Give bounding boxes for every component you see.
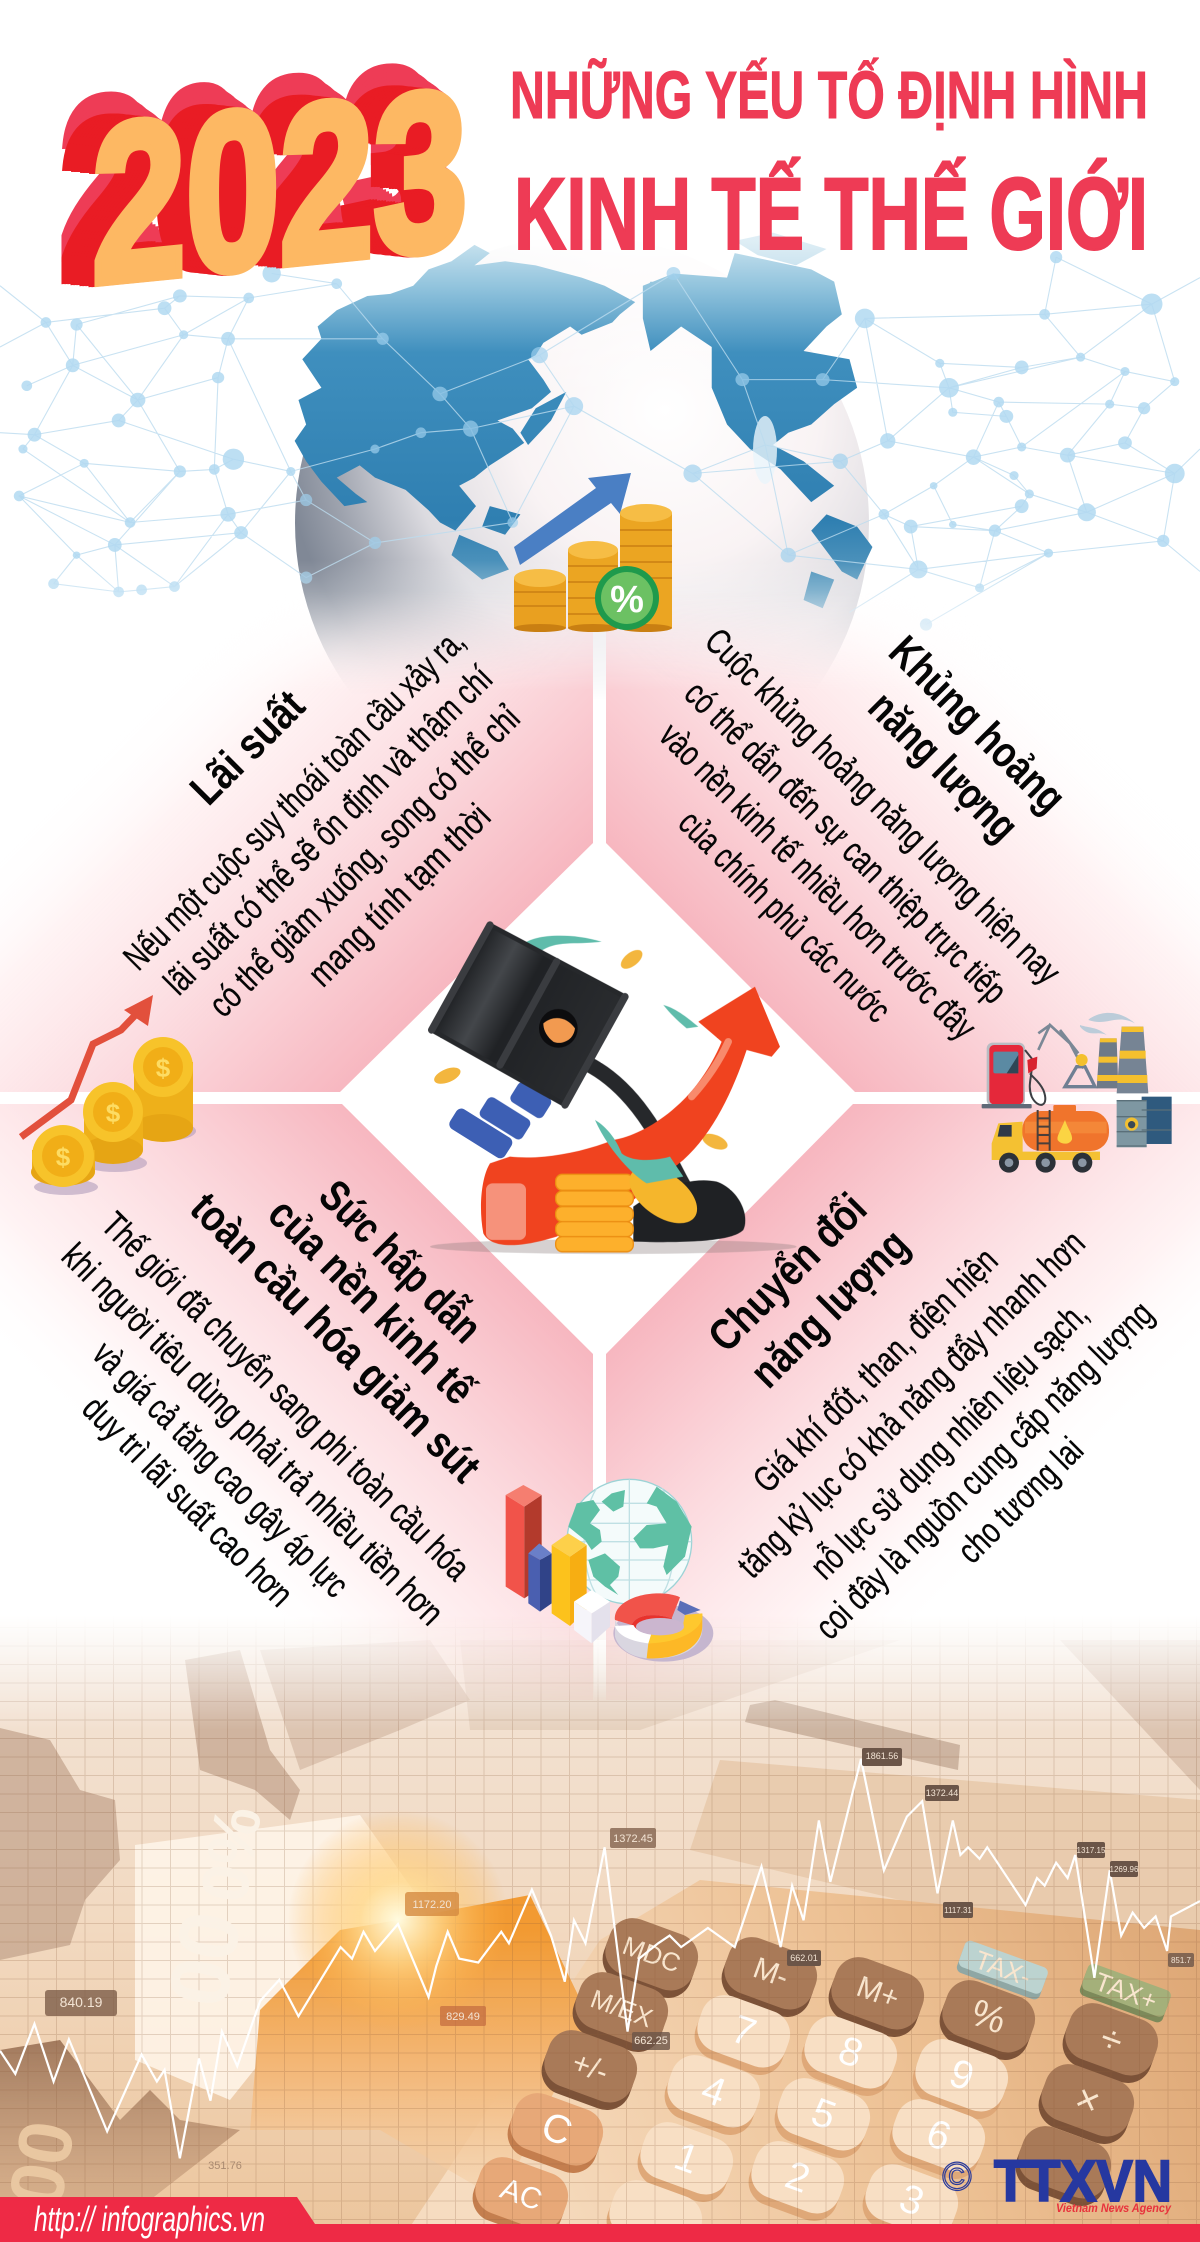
globe [567,1479,692,1604]
icon: fuel station, refinery, tanker and barrels [982,1013,1172,1173]
front face: 2023 [92,43,467,332]
panel text: Khủng hoảng năng lượng: Khủng hoảng [879,627,1075,823]
chart value tags: 840.19 [60,1994,103,2010]
panel text: Chuyển đổi năng lượng: Giá khí đốt, than, điện hiện [744,1239,1005,1500]
panel text: Sức hấp dẫn của nền kinh tế toàn cầu hóa giảm sút [54,1170,492,1633]
panel text: Chuyển đổi năng lượng: Chuyển đổi [699,1184,876,1361]
coin stack [556,1174,633,1252]
panel text: Chuyển đổi năng lượng: tăng kỷ lục có khả năng đẩy nhanh hơn [729,1222,1093,1586]
icon: rising arrow over gold coins: $ [56,1142,71,1172]
extrusion: red side faces: 2023 [62,40,437,329]
photo base tone [0,1610,1200,2242]
fade of globe and network toward the panels [0,560,1200,700]
chart value tags: 1317.15 [1077,1846,1106,1855]
panel text: Lãi suất [115,620,528,1025]
logo: TTXVN: © [942,2155,972,2199]
extrusion: red side faces: 2023 [86,43,461,332]
gap continuing into footer [594,1640,606,1700]
panel text: Lãi suất: Lãi suất [181,681,315,814]
icon: rising arrow over gold coins: $ [156,1053,171,1083]
chart value tags: 829.49 [446,2011,480,2023]
extrusion: pink upper faces: 2023 [86,39,461,328]
calculator keys: TAX- [971,1944,1035,1992]
calculator keys: ÷ [1094,2017,1128,2064]
icon: coins, percent and arrow: % [610,579,644,621]
tanker truck [992,1122,1100,1160]
blue bars [447,1080,553,1161]
panel text: Khủng hoảng năng lượng: vào nền kinh tế nhiều hơn trước đây [652,714,985,1047]
rotated percent and zeros: 00 [150,1905,259,2013]
calculator keys: M/EX [587,1983,657,2033]
panel: bottom right [606,1104,1200,1700]
calculator keys: × [1069,2076,1106,2125]
chart value tags: 1172.20 [413,1899,451,1911]
smoke [1080,1013,1135,1035]
chart value tags: 1372.44 [926,1788,958,1798]
extrusion: pink upper faces: 2023 [83,37,458,326]
calculator display [745,1700,960,1770]
chimneys [1097,1038,1118,1088]
extrusion: pink upper faces: 2023 [71,28,446,317]
panel text: Khủng hoảng năng lượng: có thể dẫn đến sự can thiệp trực tiếp [677,673,1015,1011]
panel text: Sức hấp dẫn của nền kinh tế toàn cầu hóa giảm sút: Thế giới đã chuyển sang phi toàn cầu hóa [94,1204,479,1589]
calculator upper body [690,1760,1200,1930]
rotated percent and zeros [0,1801,275,2213]
panel: bottom left [0,1104,593,1700]
panel text: Chuyển đổi năng lượng: cho tương lai [949,1429,1091,1571]
yellow bar [552,1533,587,1626]
chart value tags: 1372.45 [613,1833,653,1845]
extrusion: red side faces: 2023 [77,42,452,331]
calculator keys: TAX+ [1091,1966,1161,2016]
calculator keys: +/- [568,2046,613,2089]
panel text: Lãi suất: Nếu một cuộc suy thoái toàn cầu xảy ra, [115,620,473,978]
icon: oil barrel, rising arrow and coins [430,925,797,1254]
extrusion: pink upper faces: 2023 [62,21,437,310]
calculator keys: MDC [619,1930,685,1979]
calculator keys: M+ [852,1970,904,2016]
orange area under chart [250,1895,590,2200]
calculator keys: 7 [726,2007,762,2056]
extrusion: red side faces: 2023 [80,42,455,331]
grid overlay [0,1610,1200,2242]
panel text: Lãi suất: có thể giảm xuống, song có thể chỉ [200,697,528,1025]
chart value tags: 851.7 [1171,1956,1192,1965]
barrel [432,925,625,1105]
faded map and banknote shapes [0,1640,1200,1960]
calculator keys: 8 [833,2028,869,2077]
barrels [1142,1097,1172,1144]
icon: rising arrow over gold coins: $ [106,1098,121,1128]
network of connected nodes [0,251,1200,631]
logo: TTXVN: TTXVN [994,2149,1172,2214]
panel text: Chuyển đổi năng lượng: năng lượng [741,1220,918,1397]
crane [1038,1025,1083,1068]
icon: bar chart, globe and donut chart [506,1479,713,1662]
panel text: Lãi suất: mang tính tạm thời [300,796,498,994]
extrusion: red side faces: 2023 [71,41,446,330]
rotated percent and zeros: 0% [186,1801,275,1907]
extrusion: pink upper faces: 2023 [80,34,455,323]
icon: coins, percent and arrow [514,473,672,632]
big coin and green note [595,1120,707,1235]
white cube [574,1590,610,1643]
calculator keys: 9 [944,2051,980,2100]
extrusion: red side faces: 2023 [68,41,443,330]
footer red band [0,2197,1200,2242]
extrusion: pink upper faces: 2023 [77,32,452,321]
panel text: Sức hấp dẫn của nền kinh tế toàn cầu hóa giảm sút: khi người tiêu dùng phải trả nhiều tiền hơn [54,1235,452,1633]
extrusion: red side faces: 2023 [74,41,449,330]
red bar [506,1485,542,1598]
extrusion: red side faces: 2023 [83,42,458,331]
calculator body [400,1880,1200,2242]
pump [987,1043,1025,1106]
calculator keys: 4 [696,2067,732,2116]
blue bar [528,1543,552,1612]
panel text: Lãi suất: lãi suất có thể sẽ ổn định và thậm chí [155,657,500,1002]
panel text: Sức hấp dẫn của nền kinh tế toàn cầu hóa giảm sút: Sức hấp dẫn [309,1170,492,1353]
title [510,57,1148,271]
2023 numeral [59,18,467,332]
footer url: http:// infographics.vn [34,2200,265,2239]
red arrow [481,987,780,1245]
white cover below the globe [0,699,1200,839]
calculator keys: AC [496,2172,546,2217]
extrusion: pink upper faces: 2023 [74,30,449,319]
calculator keys [466,1911,1173,2242]
chart value tags [45,1748,1194,2172]
calculator keys: % [965,1992,1011,2043]
extrusion: pink upper faces: 2023 [68,25,443,314]
chart value tags: 1269.96 [1110,1865,1139,1874]
panel: top right [606,580,1200,1092]
calculator keys: 2 [780,2153,816,2202]
panel text: Sức hấp dẫn của nền kinh tế toàn cầu hóa giảm sút: toàn cầu hóa giảm sút [181,1183,490,1492]
extrusion: red side faces: 2023 [59,40,434,329]
footer photo background [0,1610,1200,2242]
panel text: Sức hấp dẫn của nền kinh tế toàn cầu hóa giảm sút: và giá cả tăng cao gây áp lực [85,1333,357,1605]
chart value tags: 1861.56 [866,1751,898,1761]
logo: TTXVN: Vietnam News Agency [1056,2201,1172,2215]
panel text: Khủng hoảng năng lượng: của chính phủ các nước [671,802,899,1030]
calculator keys: 1 [669,2134,705,2183]
globe [294,233,872,811]
calculator keys: 5 [806,2090,842,2139]
stock line chart [0,1759,1200,2158]
panel text: Sức hấp dẫn của nền kinh tế toàn cầu hóa giảm sút: của nền kinh tế [259,1189,484,1415]
calculator keys: M- [749,1951,793,1994]
sun glow [292,1815,501,2010]
panel: top left [0,580,593,1092]
chart value tags: 662.01 [790,1953,818,1963]
panel text: Khủng hoảng năng lượng [652,620,1075,1047]
hose and oil blob [587,1063,745,1242]
small coins and notes [432,936,730,1153]
bright window [135,1815,420,2100]
panel text: Chuyển đổi năng lượng: nỗ lực sử dụng nhiên liệu sạch, [802,1293,1096,1587]
panel text: Khủng hoảng năng lượng: Cuộc khủng hoảng năng lượng hiện nay [697,620,1069,992]
extrusion: pink upper faces: 2023 [65,23,440,312]
extrusion: red side faces: 2023 [65,40,440,329]
extrusion: red side faces: 2023 [89,43,464,332]
chart value tags: 351.76 [208,2160,242,2172]
donut chart [613,1593,713,1662]
calculator keys: 3 [894,2176,930,2225]
chart value tags: 662.25 [634,2035,668,2047]
calculator keys: 6 [921,2111,957,2160]
extrusion: pink upper faces: 2023 [59,18,434,307]
dark lower left corner [0,2040,240,2200]
panel text: Khủng hoảng năng lượng: năng lượng [859,682,1028,851]
icon: rising arrow over gold coins [21,995,196,1195]
calculator keys: C [536,2104,578,2155]
chart value tags: 1117.31 [944,1906,972,1915]
panel text: Sức hấp dẫn của nền kinh tế toàn cầu hóa giảm sút: duy trì lãi suất cao hơn [75,1387,302,1614]
extrusion: pink upper faces: 2023 [89,41,464,330]
